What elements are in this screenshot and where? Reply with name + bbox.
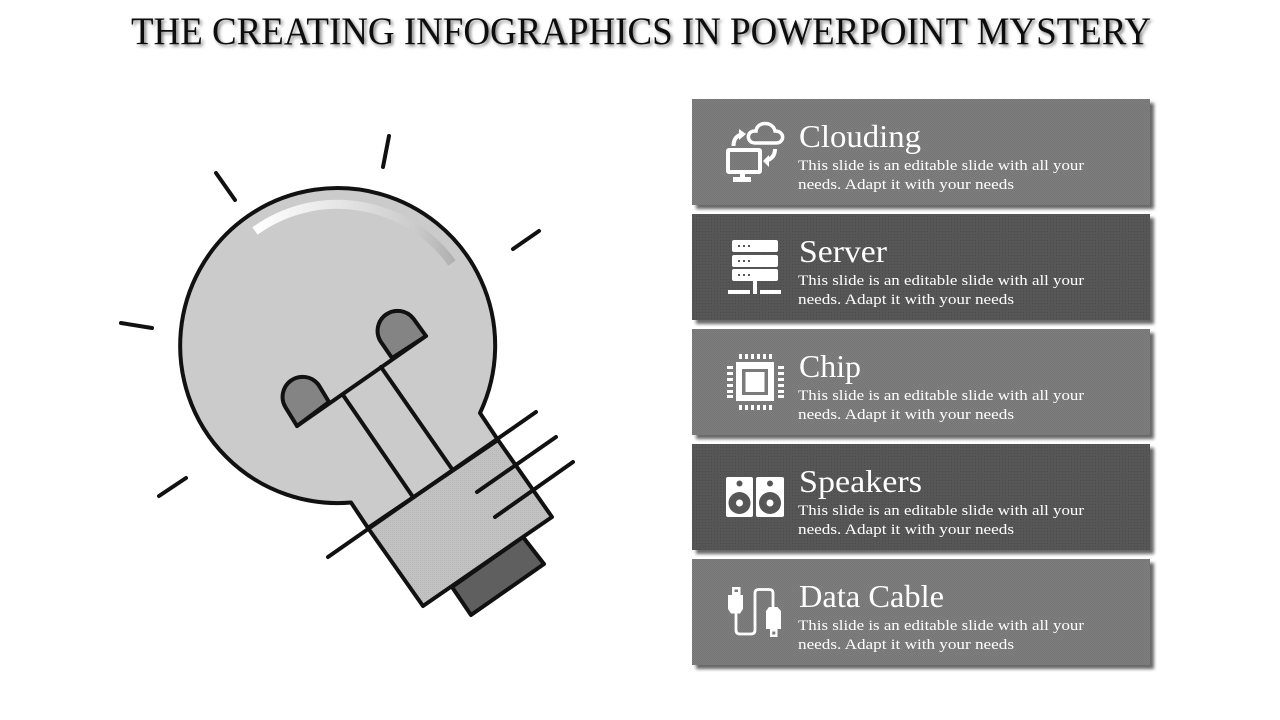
panel background [692,329,1150,435]
body text [798,503,1084,538]
heading: Data Cable [799,578,944,614]
body text: This slide is an editable slide with all your [798,273,1084,289]
body text [798,388,1084,423]
bulb glass [180,188,498,528]
icon: server rack [728,240,781,294]
icon: speakers [726,477,784,517]
filament right cap [378,311,426,358]
icon: processor chip [727,354,784,410]
heading: Speakers [799,463,922,499]
body text: needs. Adapt it with your needs [798,407,1014,423]
body text: needs. Adapt it with your needs [798,177,1014,193]
panel: server [692,214,1150,320]
heading: Server [799,233,887,269]
title: THE CREATING INFOGRAPHICS IN POWERPOINT MYSTERY [131,10,1151,53]
light bulb illustration [121,136,573,615]
body text: This slide is an editable slide with all your [798,618,1084,634]
panel background [692,214,1150,320]
body text: This slide is an editable slide with all your [798,158,1084,174]
body text: needs. Adapt it with your needs [798,637,1014,653]
icon: cloud and monitor sync [728,124,783,182]
body text: This slide is an editable slide with all your [798,388,1084,404]
body text: needs. Adapt it with your needs [798,292,1014,308]
light rays [121,136,539,496]
panel: data cable [692,559,1150,665]
panel background [692,99,1150,205]
bulb tip [452,537,544,615]
body text [798,273,1084,308]
screw base [368,440,552,606]
filament stems [343,367,452,497]
base thread lines [328,412,573,557]
filament left cap [283,377,329,426]
panel: speakers [692,444,1150,550]
body text [798,158,1084,193]
body text [798,618,1084,653]
panel: clouding [692,99,1150,205]
heading: Chip [799,348,861,384]
body text: needs. Adapt it with your needs [798,522,1014,538]
filament crossbar [297,336,426,426]
panel: chip [692,329,1150,435]
body text: This slide is an editable slide with all your [798,503,1084,519]
glass highlight [255,204,452,263]
panel background [692,444,1150,550]
icon: data cable [728,587,781,637]
heading: Clouding [799,118,921,154]
panel background [692,559,1150,665]
